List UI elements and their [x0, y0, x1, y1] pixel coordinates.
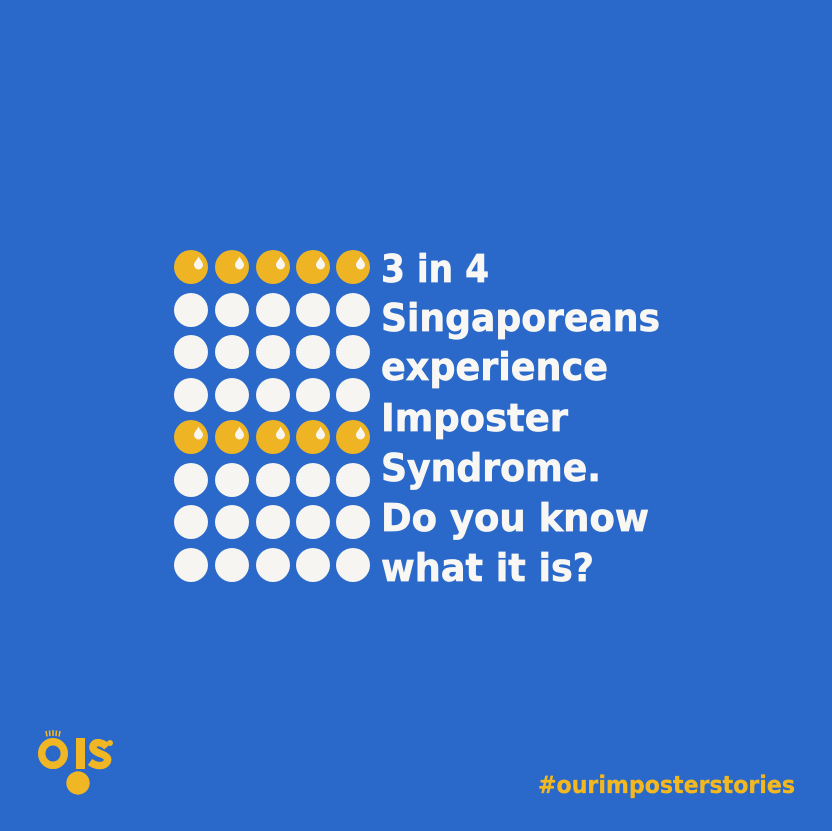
- headline text: Imposter: [381, 396, 568, 440]
- row 1 highlighted: [174, 250, 370, 284]
- row 8: [174, 548, 370, 582]
- dot grid: 3 in 4: [174, 250, 370, 582]
- logo rays: [46, 730, 60, 736]
- headline text: [381, 247, 660, 590]
- row 2: [174, 293, 370, 327]
- headline text: Do you know: [381, 496, 649, 540]
- row 4: [174, 378, 370, 412]
- row 3: [174, 335, 370, 369]
- hashtag: #ourimposterstories: [538, 771, 795, 799]
- row 6: [174, 463, 370, 497]
- logo dot: [66, 771, 90, 795]
- logo registered dot: [107, 740, 113, 746]
- logo letter O: [42, 742, 64, 765]
- row 5 highlighted: [174, 420, 370, 454]
- logo letter S: [90, 743, 108, 766]
- row 7: [174, 505, 370, 539]
- headline text: what it is?: [381, 546, 594, 590]
- logo letter I: [76, 738, 85, 769]
- headline text: 3 in 4: [381, 247, 489, 291]
- logo: OIS: [42, 730, 113, 795]
- headline text: Singaporeans: [381, 296, 660, 340]
- headline text: Syndrome.: [381, 446, 601, 490]
- headline text: experience: [381, 345, 608, 389]
